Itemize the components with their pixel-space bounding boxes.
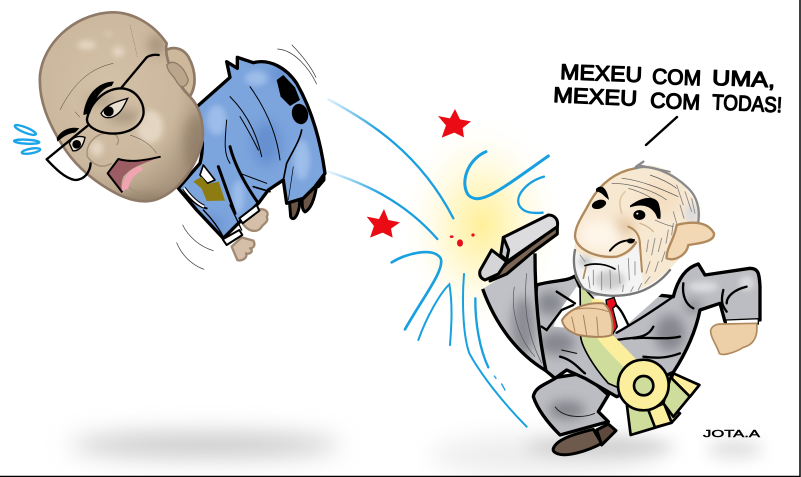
head outlines [574, 162, 699, 296]
sash [580, 283, 642, 388]
speech line 1: COM [652, 65, 702, 90]
wrinkles [60, 25, 157, 153]
raised shoe [480, 215, 558, 281]
head traced [573, 162, 714, 296]
cuffs [223, 205, 259, 245]
blue jacket [178, 57, 325, 238]
shoes [289, 173, 324, 219]
speech line 2: COM [650, 88, 701, 115]
eye white [636, 213, 638, 215]
shirt [553, 283, 673, 332]
figure: flying man [14, 12, 325, 269]
speech line 2 [553, 83, 783, 118]
jacket folds [180, 87, 302, 240]
star left [367, 209, 400, 238]
star top [438, 109, 471, 138]
speech line 1 [560, 60, 776, 93]
sweat drops [14, 123, 41, 155]
head shading [77, 32, 210, 207]
jacket [536, 264, 760, 397]
eyebrows [57, 82, 114, 142]
speech tail [646, 117, 677, 145]
hand on chest [562, 303, 613, 337]
jacket shading [205, 65, 310, 237]
jacket outline [178, 57, 325, 238]
eyes [69, 98, 128, 151]
ground shadows [70, 433, 763, 475]
tie [606, 297, 617, 334]
head outline [40, 12, 203, 201]
chin line [128, 187, 160, 194]
impact splash and stars [328, 99, 548, 427]
impact glow [397, 113, 567, 337]
mouth and nostril [610, 239, 634, 251]
mouth [108, 157, 161, 192]
eyebrows and eyes [591, 187, 661, 220]
impact dots [450, 233, 475, 247]
ribbon tails [627, 373, 699, 435]
splash lines [328, 99, 548, 427]
face tones [580, 182, 680, 250]
figure: kicking man [480, 162, 760, 455]
nose [87, 133, 118, 166]
speech line 1: MEXEU [560, 60, 643, 87]
speech line 2: MEXEU [553, 83, 638, 111]
speech line 2: TODAS! [712, 90, 783, 117]
shirt and tie [184, 165, 225, 207]
fist [711, 323, 757, 354]
ear [667, 223, 714, 259]
shoulder patches [277, 75, 310, 126]
raised leg [483, 253, 546, 371]
motion lines [177, 45, 317, 269]
ear [160, 48, 195, 98]
rosette [618, 360, 669, 410]
beard [573, 242, 643, 296]
speech line 1: UMA, [712, 66, 776, 92]
back shoe [553, 424, 616, 455]
inner ear [167, 62, 188, 87]
back hair tone [685, 203, 698, 223]
speech bubble text [553, 60, 783, 118]
standing leg [533, 373, 608, 435]
glasses [47, 55, 159, 180]
signature: JOTA.A [703, 428, 760, 440]
head [40, 12, 203, 201]
head fill [573, 165, 699, 296]
forehead wrinkles [612, 175, 678, 227]
lapel lines [542, 283, 747, 373]
hands [232, 209, 268, 260]
cuff [726, 319, 758, 325]
hair and beard strokes [580, 185, 695, 292]
